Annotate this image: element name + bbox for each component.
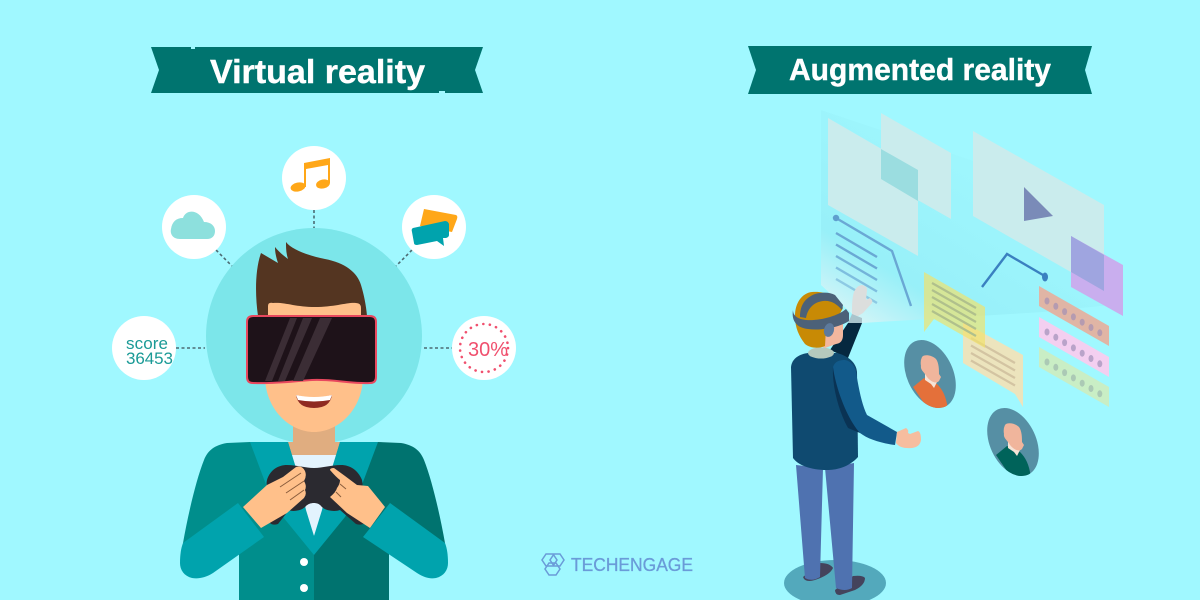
- person: collar: [808, 348, 834, 358]
- person: shoes: [803, 563, 865, 595]
- banner: Augmented reality: Augmented reality: [789, 52, 1052, 87]
- text lines panel: [833, 215, 911, 306]
- icon: chat bubbles: [402, 195, 466, 259]
- character: jacket left: [183, 442, 314, 600]
- person: arm: [833, 360, 897, 445]
- chat note: cream: [963, 322, 1023, 407]
- icon: score: [112, 316, 176, 380]
- banner: Augmented reality: [748, 46, 1092, 94]
- VR headset: [247, 316, 376, 383]
- character: left hand: [243, 466, 306, 528]
- panel: top middle: [881, 113, 951, 219]
- projection beam: [821, 110, 1110, 323]
- panel: top left: [828, 118, 918, 256]
- banner: Virtual reality: [151, 47, 483, 93]
- character: shirt: [292, 455, 336, 536]
- person: raised hand: [848, 285, 872, 323]
- icon: play: [1024, 187, 1053, 221]
- character: buttons: [300, 558, 308, 592]
- character: mouth: [296, 395, 332, 408]
- character: lapels: [250, 442, 378, 555]
- character: face: [265, 378, 363, 432]
- character: right sleeve: [363, 503, 448, 578]
- row: green dots: [1039, 347, 1109, 407]
- person: arm shadow: [833, 367, 860, 433]
- character: forehead: [268, 303, 361, 316]
- icon: score: 36453: [126, 349, 173, 368]
- character: jacket right: [314, 442, 445, 600]
- chat note: yellow: [924, 272, 985, 348]
- panel: video: [973, 131, 1104, 291]
- character: finger lines: [280, 473, 346, 500]
- chart line: [982, 254, 1048, 287]
- avatar: orange shirt: [904, 340, 956, 408]
- head halo circle: [206, 228, 422, 444]
- logo: Techengage: TECHENGAGE: [571, 555, 693, 575]
- row: orange dots: [1039, 286, 1109, 346]
- icon: music note: [282, 146, 346, 210]
- icon: score: score: [126, 334, 168, 353]
- person: torso: [791, 353, 858, 470]
- character: controller: [267, 465, 366, 525]
- row: pink dots: [1039, 317, 1109, 377]
- icon: 30 percent: 30%: [468, 339, 508, 361]
- avatar: green shirt: [987, 408, 1039, 476]
- person: head: [793, 292, 849, 348]
- connector lines: [176, 210, 452, 348]
- person: floor shadow: [784, 560, 886, 600]
- icon: cloud: [162, 195, 226, 259]
- person: hand: [896, 428, 921, 448]
- person: raised arm: [830, 323, 862, 358]
- person: legs: [796, 463, 854, 590]
- character: hair: [256, 242, 367, 316]
- character: right hand: [330, 468, 385, 528]
- character: left sleeve: [180, 503, 264, 578]
- icon: 30 percent: [452, 316, 516, 380]
- AR illustration: [784, 110, 1123, 600]
- panel: purple: [1071, 236, 1123, 316]
- VR illustration: [112, 146, 516, 600]
- character: neck: [288, 425, 340, 456]
- panel overlap: [881, 149, 918, 201]
- banner: Virtual reality: Virtual reality: [210, 53, 426, 90]
